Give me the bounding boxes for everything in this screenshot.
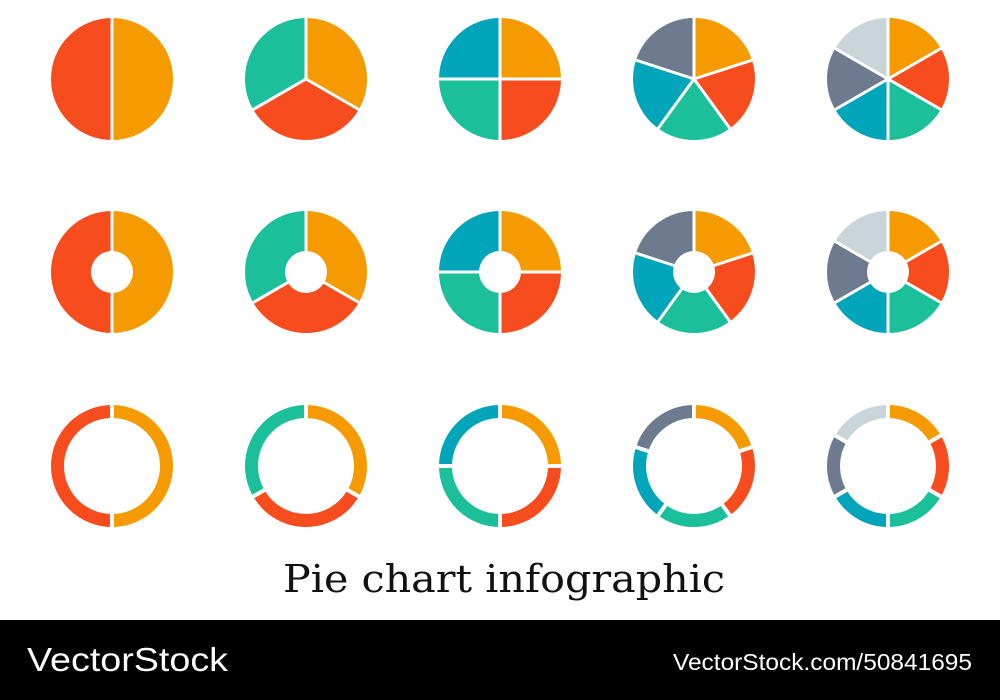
pie chart: 4 segments (437, 16, 563, 142)
donut chart: 5 segments (634, 209, 754, 323)
pie chart: 3 segments (251, 16, 361, 110)
footer bar (0, 620, 1000, 700)
row 3: ring charts (58, 403, 943, 529)
donut chart: 6 segments (833, 209, 943, 335)
title: Pie chart infographic (283, 557, 725, 601)
ring chart: 3 segments (251, 403, 361, 520)
row 1: pie charts (82, 16, 943, 142)
pie chart: 2 segments (82, 16, 142, 142)
ring chart: 4 segments (437, 403, 563, 529)
pie chart: 6 segments (833, 16, 943, 142)
footer logo text: VectorStock (27, 641, 229, 678)
footer url text: VectorStock.com/50841695 (673, 649, 972, 675)
donut chart: 3 segments (251, 209, 361, 304)
ring chart: 2 segments (58, 403, 166, 529)
donut chart: 2 segments (82, 209, 142, 335)
ring chart: 5 segments (634, 403, 754, 520)
row 2: donut charts (82, 209, 943, 335)
ring chart: 6 segments (833, 403, 943, 529)
donut chart: 4 segments (437, 209, 563, 335)
pie chart: 5 segments (634, 16, 754, 130)
